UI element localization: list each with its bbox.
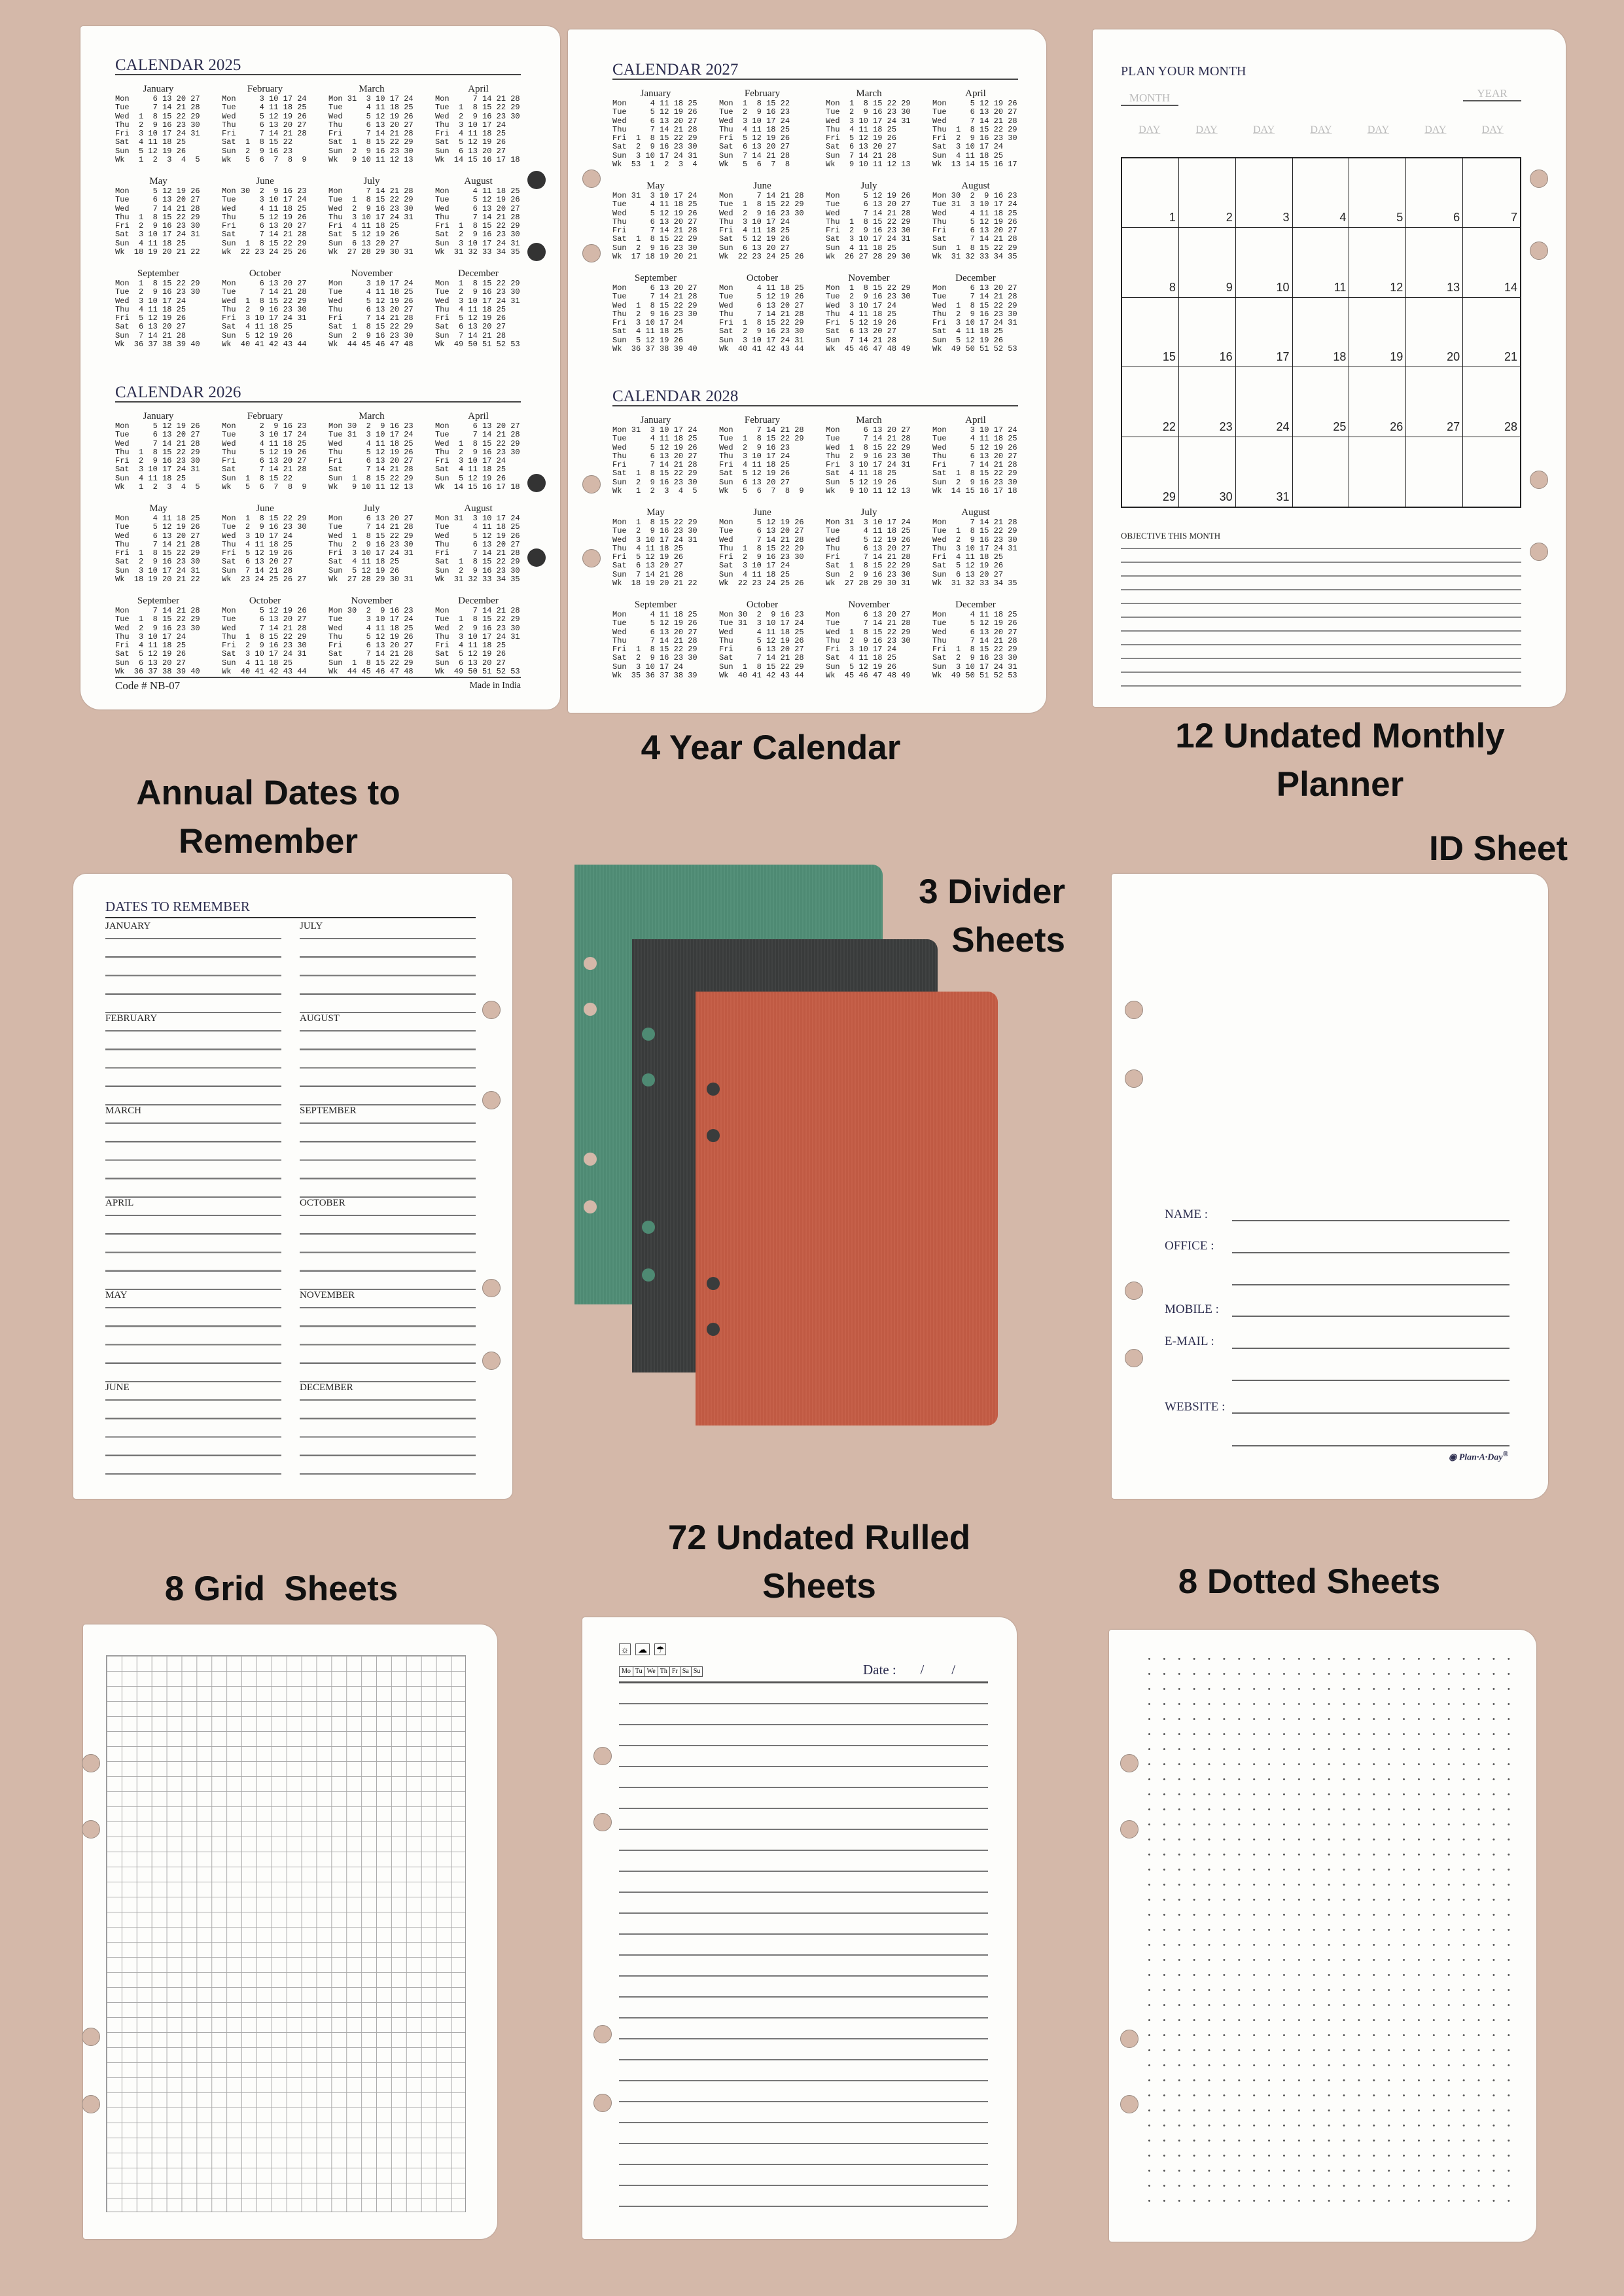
calendar 2028: June bbox=[753, 507, 771, 518]
calendar 2028: April bbox=[965, 415, 986, 425]
calendar 2026: December bbox=[458, 596, 499, 606]
left column: January-June: MARCH bbox=[105, 1105, 141, 1116]
calendar 2025: January bbox=[143, 84, 173, 94]
dot grid bbox=[1142, 1651, 1518, 2211]
panel: monthly planner bbox=[1093, 29, 1566, 707]
monthly grid: 1 bbox=[1169, 211, 1176, 224]
weekday boxes: We bbox=[647, 1668, 656, 1675]
calendar 2026: CALENDAR 2026 bbox=[115, 384, 241, 401]
calendar 2025: Mon 1 8 15 22 29 Tue 2 9 16 23 30 Wed 3 10 17 24 Thu 4 11 18 25 Fri 5 12 19 26 Sat 6 13 20 27 Sun 7 14 21 28 Wk 36 37 38 39 40 bbox=[115, 279, 200, 349]
panel: calendar 2025-2026 bbox=[80, 26, 560, 709]
calendar 2026: February bbox=[247, 411, 283, 422]
calendar 2026: Mon 31 3 10 17 24 Tue 4 11 18 25 Wed 5 12 19 26 Thu 6 13 20 27 Fri 7 14 21 28 Sat 1 8 15 22 29 Sun 2 9 16 23 30 Wk 31 32 33 34 35 bbox=[435, 514, 520, 584]
calendar 2026: April bbox=[468, 411, 489, 422]
monthly grid: 4 bbox=[1339, 211, 1346, 224]
planner heading: PLAN YOUR MONTH bbox=[1121, 64, 1246, 79]
ID fields: E-MAIL : bbox=[1165, 1335, 1214, 1348]
left column: January-June: JANUARY bbox=[105, 921, 150, 931]
monthly grid: 23 bbox=[1220, 420, 1233, 433]
calendar 2028: July bbox=[860, 507, 877, 518]
calendar 2025: February bbox=[247, 84, 283, 94]
calendar 2025: July bbox=[363, 176, 380, 187]
calendar 2025: June bbox=[256, 176, 274, 187]
day labels: DAY bbox=[1253, 124, 1275, 135]
calendar 2028: Mon 4 11 18 25 Tue 5 12 19 26 Wed 6 13 20 27 Thu 7 14 21 28 Fri 1 8 15 22 29 Sat 2 9 16 23 30 Sun 3 10 17 24 Wk 35 36 37 38 39 bbox=[612, 610, 697, 680]
day labels: DAY bbox=[1310, 124, 1332, 135]
caption: 3 Divider Sheets: Sheets bbox=[951, 921, 1065, 960]
weekday boxes bbox=[619, 1666, 703, 1677]
monthly grid: 14 bbox=[1504, 281, 1517, 294]
left column: January-June: MAY bbox=[105, 1290, 128, 1300]
weekday boxes: Tu bbox=[635, 1668, 643, 1675]
calendar 2028: Mon 7 14 21 28 Tue 1 8 15 22 29 Wed 2 9 16 23 Thu 3 10 17 24 Fri 4 11 18 25 Sat 5 12 19 26 Sun 6 13 20 27 Wk 5 6 7 8 9 bbox=[719, 425, 804, 495]
monthly grid: 15 bbox=[1163, 350, 1176, 363]
calendar 2027: September bbox=[635, 273, 677, 283]
calendar 2025: August bbox=[464, 176, 493, 187]
calendar 2025: November bbox=[351, 268, 393, 279]
monthly grid: 28 bbox=[1504, 420, 1517, 433]
calendar 2027: May bbox=[646, 181, 665, 191]
calendar 2027: Mon 1 8 15 22 Tue 2 9 16 23 Wed 3 10 17 24 Thu 4 11 18 25 Fri 5 12 19 26 Sat 6 13 20 27 Sun 7 14 21 28 Wk 5 6 7 8 bbox=[719, 99, 790, 169]
calendar 2026: Mon 30 2 9 16 23 Tue 3 10 17 24 Wed 4 11 18 25 Thu 5 12 19 26 Fri 6 13 20 27 Sat 7 14 21 28 Sun 1 8 15 22 29 Wk 44 45 46 47 48 bbox=[328, 606, 414, 676]
caption: 12 Undated Monthly Planner: Planner bbox=[1277, 765, 1403, 804]
day labels: DAY bbox=[1482, 124, 1504, 135]
calendar 2025: April bbox=[468, 84, 489, 94]
caption: 72 Undated Rulled Sheets: 72 Undated Rulled bbox=[668, 1518, 970, 1557]
calendar 2027: December bbox=[955, 273, 996, 283]
dates heading: DATES TO REMEMBER bbox=[105, 899, 250, 914]
calendar 2025: May bbox=[149, 176, 168, 187]
weekday boxes: Fr bbox=[672, 1668, 678, 1675]
right column: July-December: SEPTEMBER bbox=[300, 1105, 357, 1116]
panel: ruled sheet bbox=[582, 1617, 1017, 2239]
monthly grid bbox=[1121, 157, 1521, 508]
day labels: DAY bbox=[1196, 124, 1218, 135]
caption: 72 Undated Rulled Sheets: Sheets bbox=[762, 1567, 876, 1605]
monthly grid: 19 bbox=[1390, 350, 1403, 363]
caption: 4 Year Calendar: 4 Year Calendar bbox=[641, 728, 900, 767]
divider: green bbox=[574, 865, 883, 1304]
calendar 2026 bbox=[115, 384, 521, 676]
calendar 2025: Mon 3 10 17 24 Tue 4 11 18 25 Wed 5 12 19 26 Thu 6 13 20 27 Fri 7 14 21 28 Sat 1 8 15 22 Sun 2 9 16 23 Wk 5 6 7 8 9 bbox=[222, 94, 307, 164]
monthly grid: 31 bbox=[1277, 490, 1290, 503]
calendar 2027: November bbox=[848, 273, 890, 283]
calendar 2026: Mon 4 11 18 25 Tue 5 12 19 26 Wed 6 13 20 27 Thu 7 14 21 28 Fri 1 8 15 22 29 Sat 2 9 16 23 30 Sun 3 10 17 24 31 Wk 18 19 20 21 22 bbox=[115, 514, 200, 584]
calendar 2025: September bbox=[137, 268, 179, 279]
panel: ID sheet bbox=[1112, 874, 1548, 1499]
weekday boxes: Mo bbox=[622, 1668, 631, 1675]
calendar 2027: CALENDAR 2027 bbox=[612, 61, 738, 79]
calendar 2028: Mon 31 3 10 17 24 Tue 4 11 18 25 Wed 5 12 19 26 Thu 6 13 20 27 Fri 7 14 21 28 Sat 1 8 15 22 29 Sun 2 9 16 23 30 Wk 1 2 3 4 5 bbox=[612, 425, 697, 495]
calendar 2025: Mon 30 2 9 16 23 Tue 3 10 17 24 Wed 4 11 18 25 Thu 5 12 19 26 Fri 6 13 20 27 Sat 7 14 21 28 Sun 1 8 15 22 29 Wk 22 23 24 25 26 bbox=[222, 187, 307, 257]
footer: code: Code # NB-07 bbox=[115, 679, 180, 692]
day labels: DAY bbox=[1424, 124, 1446, 135]
calendar 2028: Mon 5 12 19 26 Tue 6 13 20 27 Wed 7 14 21 28 Thu 1 8 15 22 29 Fri 2 9 16 23 30 Sat 3 10 17 24 Sun 4 11 18 25 Wk 22 23 24 25 26 bbox=[719, 518, 804, 588]
monthly grid: 25 bbox=[1333, 420, 1346, 433]
calendar 2026: March bbox=[359, 411, 385, 422]
caption: Annual Dates to Remember: Annual Dates to bbox=[136, 774, 400, 812]
calendar 2027: July bbox=[860, 181, 877, 191]
calendar 2028: December bbox=[955, 600, 996, 610]
calendar 2025: Mon 6 13 20 27 Tue 7 14 21 28 Wed 1 8 15 22 29 Thu 2 9 16 23 30 Fri 3 10 17 24 31 Sat 4 11 18 25 Sun 5 12 19 26 Wk 1 2 3 4 5 bbox=[115, 94, 200, 164]
right column: July-December: NOVEMBER bbox=[300, 1290, 355, 1300]
calendar 2028 bbox=[612, 387, 1018, 680]
calendar 2027: October bbox=[747, 273, 778, 283]
weekday boxes: Sa bbox=[682, 1668, 689, 1675]
calendar 2027: January bbox=[641, 88, 671, 99]
ruled lines bbox=[619, 1681, 988, 2213]
day labels: DAY bbox=[1368, 124, 1389, 135]
monthly grid: 11 bbox=[1334, 281, 1346, 294]
calendar 2026: October bbox=[249, 596, 281, 606]
right column: July-December: DECEMBER bbox=[300, 1382, 353, 1393]
calendar 2028: January bbox=[641, 415, 671, 425]
calendar 2025: March bbox=[359, 84, 385, 94]
calendar 2028: November bbox=[848, 600, 890, 610]
calendar 2027: Mon 4 11 18 25 Tue 5 12 19 26 Wed 6 13 20 27 Thu 7 14 21 28 Fri 1 8 15 22 29 Sat 2 9 16 23 30 Sun 3 10 17 24 31 Wk 53 1 2 3 4 bbox=[612, 99, 697, 169]
day labels: DAY bbox=[1139, 124, 1160, 135]
calendar 2027: Mon 30 2 9 16 23 Tue 31 3 10 17 24 Wed 4 11 18 25 Thu 5 12 19 26 Fri 6 13 20 27 Sat 7 14 21 28 Sun 1 8 15 22 29 Wk 31 32 33 34 35 bbox=[932, 191, 1017, 261]
panel: dotted sheet bbox=[1109, 1630, 1536, 2242]
calendar 2026: Mon 5 12 19 26 Tue 6 13 20 27 Wed 7 14 21 28 Thu 1 8 15 22 29 Fri 2 9 16 23 30 Sat 3 10 17 24 31 Sun 4 11 18 25 Wk 40 41 42 43 44 bbox=[222, 606, 307, 676]
calendar 2025: Mon 4 11 18 25 Tue 5 12 19 26 Wed 6 13 20 27 Thu 7 14 21 28 Fri 1 8 15 22 29 Sat 2 9 16 23 30 Sun 3 10 17 24 31 Wk 31 32 33 34 35 bbox=[435, 187, 520, 257]
calendar 2027: Mon 5 12 19 26 Tue 6 13 20 27 Wed 7 14 21 28 Thu 1 8 15 22 29 Fri 2 9 16 23 30 Sat 3 10 17 24 Sun 4 11 18 25 Wk 13 14 15 16 17 bbox=[932, 99, 1017, 169]
calendar 2027: August bbox=[961, 181, 990, 191]
calendar 2026: Mon 1 8 15 22 29 Tue 2 9 16 23 30 Wed 3 10 17 24 Thu 4 11 18 25 Fri 5 12 19 26 Sat 6 13 20 27 Sun 7 14 21 28 Wk 23 24 25 26 27 bbox=[222, 514, 307, 584]
right column: July-December: AUGUST bbox=[300, 1013, 340, 1024]
panel: grid sheet bbox=[83, 1624, 497, 2239]
objective section: OBJECTIVE THIS MONTH bbox=[1121, 531, 1220, 541]
calendar 2026: Mon 7 14 21 28 Tue 1 8 15 22 29 Wed 2 9 16 23 30 Thu 3 10 17 24 Fri 4 11 18 25 Sat 5 12 19 26 Sun 6 13 20 27 Wk 36 37 38 39 40 bbox=[115, 606, 200, 676]
weather icons: ☼ bbox=[621, 1644, 629, 1655]
logo: Plan-A-Day: ◉ Plan·A·Day® bbox=[1449, 1450, 1508, 1463]
calendar 2025: Mon 5 12 19 26 Tue 6 13 20 27 Wed 7 14 21 28 Thu 1 8 15 22 29 Fri 2 9 16 23 30 Sat 3 10 17 24 31 Sun 4 11 18 25 Wk 18 19 20 21 22 bbox=[115, 187, 200, 257]
calendar 2028: Mon 6 13 20 27 Tue 7 14 21 28 Wed 1 8 15 22 29 Thu 2 9 16 23 30 Fri 3 10 17 24 Sat 4 11 18 25 Sun 5 12 19 26 Wk 45 46 47 48 49 bbox=[826, 610, 911, 680]
ID fields: OFFICE : bbox=[1165, 1239, 1214, 1253]
calendar 2027: Mon 4 11 18 25 Tue 5 12 19 26 Wed 6 13 20 27 Thu 7 14 21 28 Fri 1 8 15 22 29 Sat 2 9 16 23 30 Sun 3 10 17 24 31 Wk 40 41 42 43 44 bbox=[719, 283, 804, 353]
caption: 8 Dotted Sheets: 8 Dotted Sheets bbox=[1178, 1562, 1440, 1601]
monthly grid: 13 bbox=[1447, 281, 1460, 294]
monthly grid: 6 bbox=[1453, 211, 1460, 224]
footer: made in India: Made in India bbox=[469, 681, 521, 691]
calendar 2027 bbox=[612, 61, 1018, 353]
monthly grid: 27 bbox=[1447, 420, 1460, 433]
calendar 2027: April bbox=[965, 88, 986, 99]
calendar 2028: February bbox=[745, 415, 780, 425]
calendar 2028: Mon 6 13 20 27 Tue 7 14 21 28 Wed 1 8 15 22 29 Thu 2 9 16 23 30 Fri 3 10 17 24 31 Sat 4 11 18 25 Sun 5 12 19 26 Wk 9 10 11 12 13 bbox=[826, 425, 911, 495]
monthly grid: 30 bbox=[1220, 490, 1233, 503]
calendar 2028: Mon 31 3 10 17 24 Tue 4 11 18 25 Wed 5 12 19 26 Thu 6 13 20 27 Fri 7 14 21 28 Sat 1 8 15 22 29 Sun 2 9 16 23 30 Wk 27 28 29 30 31 bbox=[826, 518, 911, 588]
monthly grid: 24 bbox=[1277, 420, 1290, 433]
ID fields: MOBILE : bbox=[1165, 1302, 1219, 1316]
calendar 2028: March bbox=[856, 415, 882, 425]
calendar 2027: Mon 1 8 15 22 29 Tue 2 9 16 23 30 Wed 3 10 17 24 Thu 4 11 18 25 Fri 5 12 19 26 Sat 6 13 20 27 Sun 7 14 21 28 Wk 45 46 47 48 49 bbox=[826, 283, 911, 353]
weekday boxes: Th bbox=[660, 1668, 667, 1675]
calendar 2028: October bbox=[747, 600, 778, 610]
right column: July-December bbox=[300, 921, 476, 1475]
calendar 2026: September bbox=[137, 596, 179, 606]
year field bbox=[1463, 87, 1521, 101]
monthly grid: 10 bbox=[1277, 281, 1290, 294]
calendar 2027: February bbox=[745, 88, 780, 99]
ID fields bbox=[1165, 1208, 1509, 1446]
calendar 2025: Mon 31 3 10 17 24 Tue 4 11 18 25 Wed 5 12 19 26 Thu 6 13 20 27 Fri 7 14 21 28 Sat 1 8 15 22 29 Sun 2 9 16 23 30 Wk 9 10 11 12 13 bbox=[328, 94, 414, 164]
monthly grid: 5 bbox=[1396, 211, 1403, 224]
calendar 2026: Mon 6 13 20 27 Tue 7 14 21 28 Wed 1 8 15 22 29 Thu 2 9 16 23 30 Fri 3 10 17 24 Sat 4 11 18 25 Sun 5 12 19 26 Wk 14 15 16 17 18 bbox=[435, 422, 520, 492]
calendar 2028: Mon 1 8 15 22 29 Tue 2 9 16 23 30 Wed 3 10 17 24 31 Thu 4 11 18 25 Fri 5 12 19 26 Sat 6 13 20 27 Sun 7 14 21 28 Wk 18 19 20 21 22 bbox=[612, 518, 697, 588]
calendar 2026: Mon 6 13 20 27 Tue 7 14 21 28 Wed 1 8 15 22 29 Thu 2 9 16 23 30 Fri 3 10 17 24 31 Sat 4 11 18 25 Sun 5 12 19 26 Wk 27 28 29 30 31 bbox=[328, 514, 414, 584]
caption: 3 Divider Sheets bbox=[919, 872, 1065, 960]
panel: calendar 2027-2028 bbox=[568, 29, 1046, 713]
calendar 2025: Mon 7 14 21 28 Tue 1 8 15 22 29 Wed 2 9 16 23 30 Thu 3 10 17 24 31 Fri 4 11 18 25 Sat 5 12 19 26 Sun 6 13 20 27 Wk 27 28 29 30 31 bbox=[328, 187, 414, 257]
divider: black bbox=[632, 939, 938, 1372]
weather icons: ☁ bbox=[638, 1644, 647, 1655]
right column: July-December: OCTOBER bbox=[300, 1198, 345, 1208]
monthly grid: 18 bbox=[1333, 350, 1346, 363]
calendar 2027: March bbox=[856, 88, 882, 99]
monthly grid: 8 bbox=[1169, 281, 1176, 294]
calendar 2027: Mon 6 13 20 27 Tue 7 14 21 28 Wed 1 8 15 22 29 Thu 2 9 16 23 30 Fri 3 10 17 24 31 Sat 4 11 18 25 Sun 5 12 19 26 Wk 49 50 51 52 53 bbox=[932, 283, 1017, 353]
date field: Date : / / bbox=[863, 1662, 955, 1677]
divider: orange bbox=[696, 992, 998, 1426]
monthly grid: 21 bbox=[1504, 350, 1517, 363]
monthly grid: 2 bbox=[1226, 211, 1233, 224]
monthly grid: 17 bbox=[1277, 350, 1290, 363]
calendar 2025: October bbox=[249, 268, 281, 279]
calendar 2025: Mon 6 13 20 27 Tue 7 14 21 28 Wed 1 8 15 22 29 Thu 2 9 16 23 30 Fri 3 10 17 24 31 Sat 4 11 18 25 Sun 5 12 19 26 Wk 40 41 42 43 44 bbox=[222, 279, 307, 349]
calendar 2027: Mon 1 8 15 22 29 Tue 2 9 16 23 30 Wed 3 10 17 24 31 Thu 4 11 18 25 Fri 5 12 19 26 Sat 6 13 20 27 Sun 7 14 21 28 Wk 9 10 11 12 13 bbox=[826, 99, 911, 169]
caption: 72 Undated Rulled Sheets bbox=[668, 1518, 970, 1605]
caption: 8 Grid Sheets: 8 Grid Sheets bbox=[165, 1570, 398, 1608]
left column: January-June: JUNE bbox=[105, 1382, 130, 1393]
calendar 2028: CALENDAR 2028 bbox=[612, 387, 738, 405]
calendar 2026: Mon 30 2 9 16 23 Tue 31 3 10 17 24 Wed 4 11 18 25 Thu 5 12 19 26 Fri 6 13 20 27 Sat 7 14 21 28 Sun 1 8 15 22 29 Wk 9 10 11 12 13 bbox=[328, 422, 414, 492]
calendar 2027: Mon 5 12 19 26 Tue 6 13 20 27 Wed 7 14 21 28 Thu 1 8 15 22 29 Fri 2 9 16 23 30 Sat 3 10 17 24 31 Sun 4 11 18 25 Wk 26 27 28 29 30 bbox=[826, 191, 911, 261]
calendar 2027: Mon 7 14 21 28 Tue 1 8 15 22 29 Wed 2 9 16 23 30 Thu 3 10 17 24 Fri 4 11 18 25 Sat 5 12 19 26 Sun 6 13 20 27 Wk 22 23 24 25 26 bbox=[719, 191, 804, 261]
calendar 2026: November bbox=[351, 596, 393, 606]
calendar 2025: CALENDAR 2025 bbox=[115, 56, 241, 74]
calendar 2026: May bbox=[149, 503, 168, 514]
calendar 2028: September bbox=[635, 600, 677, 610]
calendar 2026: January bbox=[143, 411, 173, 422]
calendar 2028: Mon 7 14 21 28 Tue 1 8 15 22 29 Wed 2 9 16 23 30 Thu 3 10 17 24 31 Fri 4 11 18 25 Sat 5 12 19 26 Sun 6 13 20 27 Wk 31 32 33 34 35 bbox=[932, 518, 1017, 588]
monthly grid: 16 bbox=[1220, 350, 1233, 363]
calendar 2026: Mon 2 9 16 23 Tue 3 10 17 24 Wed 4 11 18 25 Thu 5 12 19 26 Fri 6 13 20 27 Sat 7 14 21 28 Sun 1 8 15 22 Wk 5 6 7 8 9 bbox=[222, 422, 307, 492]
ID fields: NAME : bbox=[1165, 1208, 1208, 1221]
monthly grid: 20 bbox=[1447, 350, 1460, 363]
weekday boxes: Su bbox=[694, 1668, 700, 1675]
month field bbox=[1121, 92, 1178, 106]
ID fields: WEBSITE : bbox=[1165, 1400, 1225, 1414]
monthly grid: 3 bbox=[1283, 211, 1290, 224]
caption: Annual Dates to Remember: Remember bbox=[179, 822, 358, 861]
calendar 2027: June bbox=[753, 181, 771, 191]
calendar 2025: Mon 7 14 21 28 Tue 1 8 15 22 29 Wed 2 9 16 23 30 Thu 3 10 17 24 Fri 4 11 18 25 Sat 5 12 19 26 Sun 6 13 20 27 Wk 14 15 16 17 18 bbox=[435, 94, 520, 164]
calendar 2028: Mon 4 11 18 25 Tue 5 12 19 26 Wed 6 13 20 27 Thu 7 14 21 28 Fri 1 8 15 22 29 Sat 2 9 16 23 30 Sun 3 10 17 24 31 Wk 49 50 51 52 53 bbox=[932, 610, 1017, 680]
caption: 3 Divider Sheets: 3 Divider bbox=[919, 872, 1065, 911]
day labels bbox=[1139, 124, 1504, 135]
panel: dates to remember bbox=[73, 874, 512, 1499]
calendar 2027: Mon 31 3 10 17 24 Tue 4 11 18 25 Wed 5 12 19 26 Thu 6 13 20 27 Fri 7 14 21 28 Sat 1 8 15 22 29 Sun 2 9 16 23 30 Wk 17 18 19 20 21 bbox=[612, 191, 697, 261]
weather icons bbox=[619, 1643, 666, 1655]
year field: YEAR bbox=[1477, 87, 1508, 99]
calendar 2028: August bbox=[961, 507, 990, 518]
calendar 2026: August bbox=[464, 503, 493, 514]
monthly grid: 26 bbox=[1390, 420, 1403, 433]
calendar 2028: Mon 30 2 9 16 23 Tue 31 3 10 17 24 Wed 4 11 18 25 Thu 5 12 19 26 Fri 6 13 20 27 Sat 7 14 21 28 Sun 1 8 15 22 29 Wk 40 41 42 43 44 bbox=[719, 610, 804, 680]
weather icons: ☂ bbox=[656, 1644, 664, 1655]
calendar 2028: Mon 3 10 17 24 Tue 4 11 18 25 Wed 5 12 19 26 Thu 6 13 20 27 Fri 7 14 21 28 Sat 1 8 15 22 29 Sun 2 9 16 23 30 Wk 14 15 16 17 18 bbox=[932, 425, 1017, 495]
caption: Annual Dates to Remember bbox=[136, 774, 400, 861]
calendar 2026: Mon 7 14 21 28 Tue 1 8 15 22 29 Wed 2 9 16 23 30 Thu 3 10 17 24 31 Fri 4 11 18 25 Sat 5 12 19 26 Sun 6 13 20 27 Wk 49 50 51 52 53 bbox=[435, 606, 520, 676]
right column: July-December: JULY bbox=[300, 921, 323, 931]
left column: January-June: FEBRUARY bbox=[105, 1013, 157, 1024]
caption: 12 Undated Monthly Planner bbox=[1175, 717, 1505, 804]
calendar 2026: Mon 5 12 19 26 Tue 6 13 20 27 Wed 7 14 21 28 Thu 1 8 15 22 29 Fri 2 9 16 23 30 Sat 3 10 17 24 31 Sun 4 11 18 25 Wk 1 2 3 4 5 bbox=[115, 422, 200, 492]
grid pattern bbox=[106, 1655, 466, 2212]
left column: January-June bbox=[105, 921, 281, 1475]
calendar 2027: Mon 6 13 20 27 Tue 7 14 21 28 Wed 1 8 15 22 29 Thu 2 9 16 23 30 Fri 3 10 17 24 Sat 4 11 18 25 Sun 5 12 19 26 Wk 36 37 38 39 40 bbox=[612, 283, 697, 353]
monthly grid: 12 bbox=[1390, 281, 1403, 294]
monthly grid: 29 bbox=[1163, 490, 1176, 503]
calendar 2026: July bbox=[363, 503, 380, 514]
calendar 2025: December bbox=[458, 268, 499, 279]
calendar 2025: Mon 1 8 15 22 29 Tue 2 9 16 23 30 Wed 3 10 17 24 31 Thu 4 11 18 25 Fri 5 12 19 26 Sat 6 13 20 27 Sun 7 14 21 28 Wk 49 50 51 52 53 bbox=[435, 279, 520, 349]
left column: January-June: APRIL bbox=[105, 1198, 133, 1208]
calendar 2028: May bbox=[646, 507, 665, 518]
monthly grid: 22 bbox=[1163, 420, 1176, 433]
monthly grid: 7 bbox=[1511, 211, 1517, 224]
calendar 2026: June bbox=[256, 503, 274, 514]
caption: ID Sheet: ID Sheet bbox=[1429, 829, 1568, 868]
calendar 2025 bbox=[115, 56, 521, 349]
month field: MONTH bbox=[1129, 92, 1170, 104]
caption: 12 Undated Monthly Planner: 12 Undated Monthly bbox=[1175, 717, 1505, 755]
calendar 2025: Mon 3 10 17 24 Tue 4 11 18 25 Wed 5 12 19 26 Thu 6 13 20 27 Fri 7 14 21 28 Sat 1 8 15 22 29 Sun 2 9 16 23 30 Wk 44 45 46 47 48 bbox=[328, 279, 414, 349]
monthly grid: 9 bbox=[1226, 281, 1233, 294]
objective section bbox=[1121, 530, 1521, 687]
